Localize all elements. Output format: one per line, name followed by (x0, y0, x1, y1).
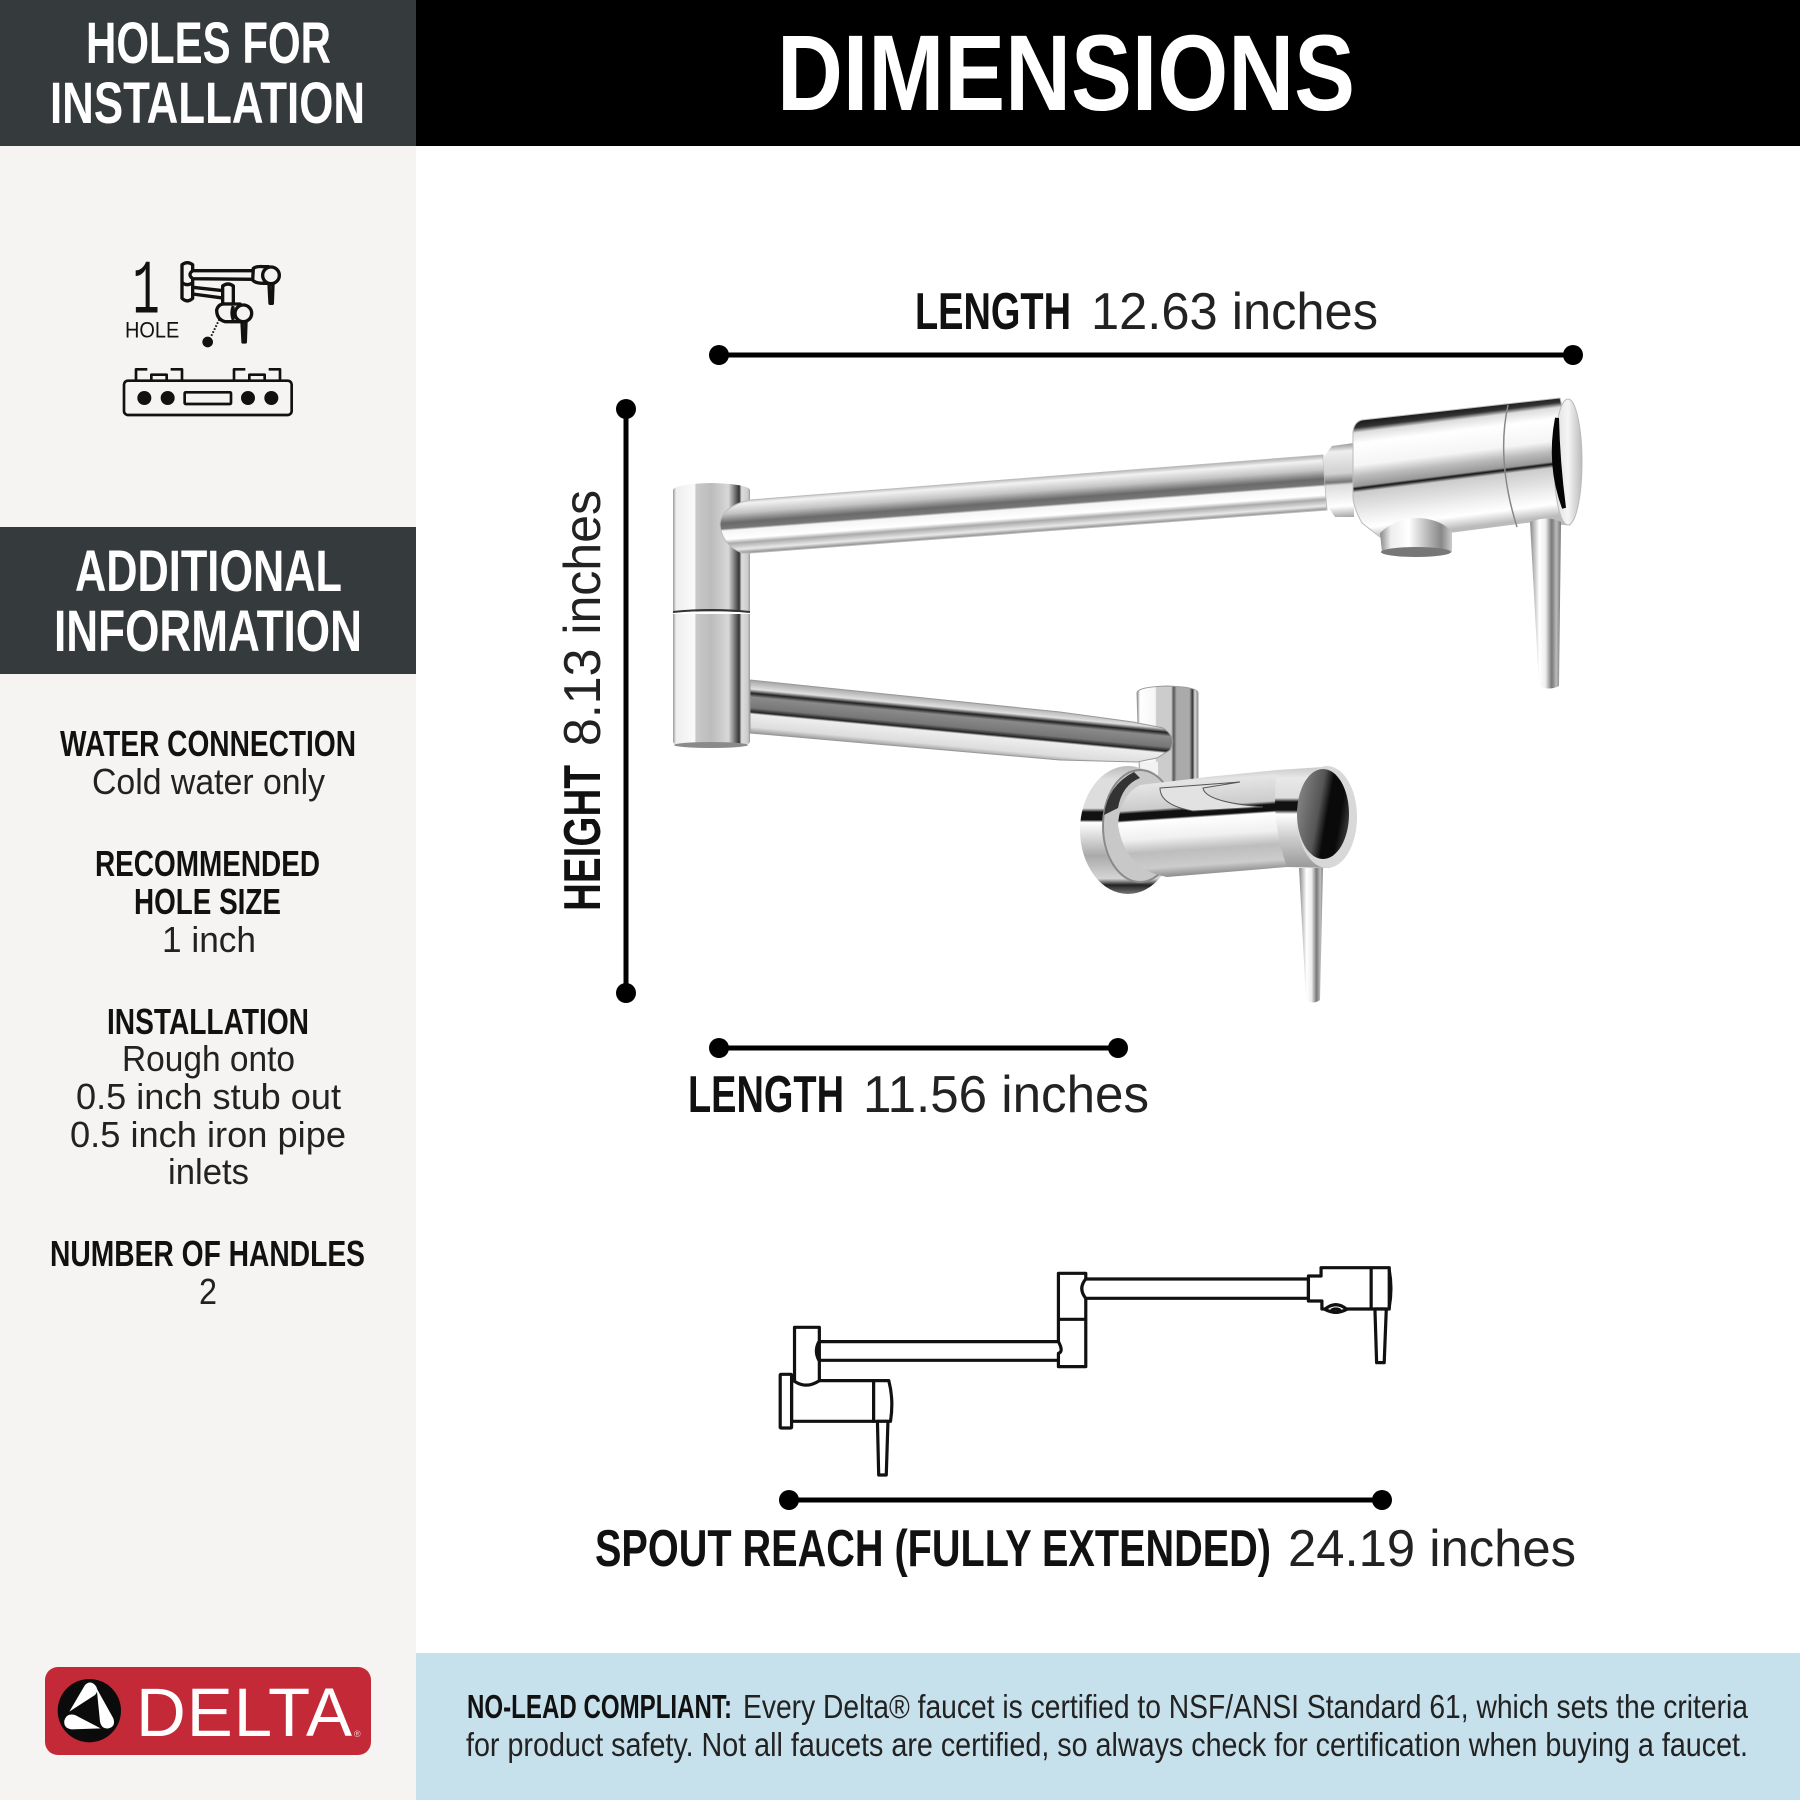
text block: recommended hole size (95, 843, 320, 960)
icon: cooktop line art (124, 369, 292, 415)
text block: water connection (60, 723, 356, 802)
head end shadow crescent (1554, 418, 1564, 508)
title banner: DIMENSIONS (777, 12, 1355, 133)
title banner (416, 0, 1800, 146)
text block: installation: Rough onto (122, 1038, 295, 1079)
spout head body (1353, 398, 1575, 537)
heading: additional information: INFORMATION (54, 599, 362, 664)
text block: installation: 0.5 inch stub out (76, 1076, 341, 1117)
handle end face (1297, 769, 1349, 859)
dimension: height (554, 399, 636, 1003)
dimension: height: 8.13 inches (554, 490, 612, 746)
logo mark (58, 1679, 121, 1742)
post base curve (1160, 782, 1263, 811)
text block: water connection: Cold water only (92, 761, 325, 802)
icon: dotted connector to hole (202, 319, 219, 347)
text block: number of handles: NUMBER OF HANDLES (50, 1233, 365, 1274)
footer: no-lead compliant note (416, 1653, 1800, 1800)
icon numeral and label: HOLE (125, 318, 179, 343)
lower arm (750, 680, 1173, 762)
handle end rim (1297, 766, 1357, 868)
spout head collar (1323, 443, 1354, 517)
wall body cylinder (1118, 770, 1287, 877)
logo wordmark: DELTA (136, 1674, 352, 1751)
text block: recommended hole size: RECOMMENDED (95, 843, 320, 884)
dimension: spout reach: 24.19 inches (1288, 1520, 1576, 1578)
product photo: chrome pot filler faucet (673, 398, 1582, 1002)
text block: installation: inlets (168, 1151, 249, 1192)
first arm (816, 1342, 1061, 1360)
flange shadow (1104, 772, 1140, 815)
icon: one hole faucet with cooktop (124, 249, 292, 415)
dimension: spout reach: SPOUT REACH (FULLY EXTENDED) (595, 1520, 1271, 1578)
spout aerator (1325, 1305, 1347, 1312)
wall lever (877, 1421, 888, 1475)
text block: recommended hole size: HOLE SIZE (134, 881, 281, 922)
second arm (1082, 1279, 1308, 1298)
text block: water connection: WATER CONNECTION (60, 723, 356, 764)
wall body (792, 1381, 874, 1421)
logo: delta (45, 1667, 371, 1755)
heading: holes for installation (0, 0, 416, 146)
logo registered mark: ® (354, 1729, 361, 1739)
spout lever (1375, 1309, 1386, 1363)
lower pivot base (674, 742, 748, 748)
text block: installation (70, 1001, 346, 1192)
icon: faucet line art (182, 263, 279, 342)
lower pivot cylinder (673, 614, 750, 748)
dimension: top length: 12.63 inches (1091, 283, 1378, 341)
heading: holes for installation: HOLES FOR (86, 11, 331, 76)
heading: holes for installation: INSTALLATION (50, 71, 365, 136)
first pivot (795, 1327, 819, 1385)
pivot joint line (673, 610, 750, 612)
handle cap (1275, 767, 1330, 868)
dimension: bottom length: 11.56 inches (863, 1066, 1149, 1124)
text block: recommended hole size: 1 inch (162, 919, 256, 960)
spout aerator opening (1332, 1309, 1340, 1312)
spout head (1308, 1268, 1389, 1309)
upper pivot cylinder (673, 483, 750, 612)
dimension: height: HEIGHT (554, 765, 612, 911)
head end face (1554, 399, 1582, 525)
head seam (1504, 405, 1517, 527)
icon numeral and label: 1 (132, 249, 160, 336)
text block: number of handles (50, 1233, 365, 1312)
collar under arm (1140, 762, 1158, 788)
dimension: top length: LENGTH (915, 283, 1071, 341)
dimension: bottom length (688, 1038, 1149, 1124)
footer: no-lead compliant note: NO-LEAD COMPLIANT: (467, 1688, 732, 1725)
text block: installation: INSTALLATION (107, 1001, 309, 1042)
spout head seam (1371, 1268, 1391, 1309)
flange inner ring (1103, 770, 1177, 882)
line drawing: fully extended faucet (780, 1268, 1391, 1475)
aerator opening (1381, 547, 1451, 557)
upper lever (1530, 518, 1561, 688)
wall flange (780, 1374, 792, 1428)
wall handle cap (874, 1381, 892, 1421)
lower lever (1299, 868, 1323, 1002)
panel: left sidebar (0, 0, 416, 1800)
aerator spout (1380, 518, 1452, 557)
upper arm (720, 455, 1327, 553)
text block: number of handles: 2 (199, 1271, 217, 1312)
central pivot (1058, 1273, 1086, 1367)
heading: additional information (0, 527, 416, 674)
dimension: bottom length: LENGTH (688, 1066, 844, 1124)
dimension: top length (709, 283, 1583, 365)
wall flange (1080, 766, 1176, 894)
vertical post (1137, 686, 1198, 790)
dimension: spout reach (595, 1490, 1576, 1578)
central pivot joint (1058, 1318, 1086, 1321)
first pivot socket (816, 1342, 819, 1360)
heading: additional information: ADDITIONAL (75, 539, 342, 604)
text block: installation: 0.5 inch iron pipe (70, 1114, 346, 1155)
